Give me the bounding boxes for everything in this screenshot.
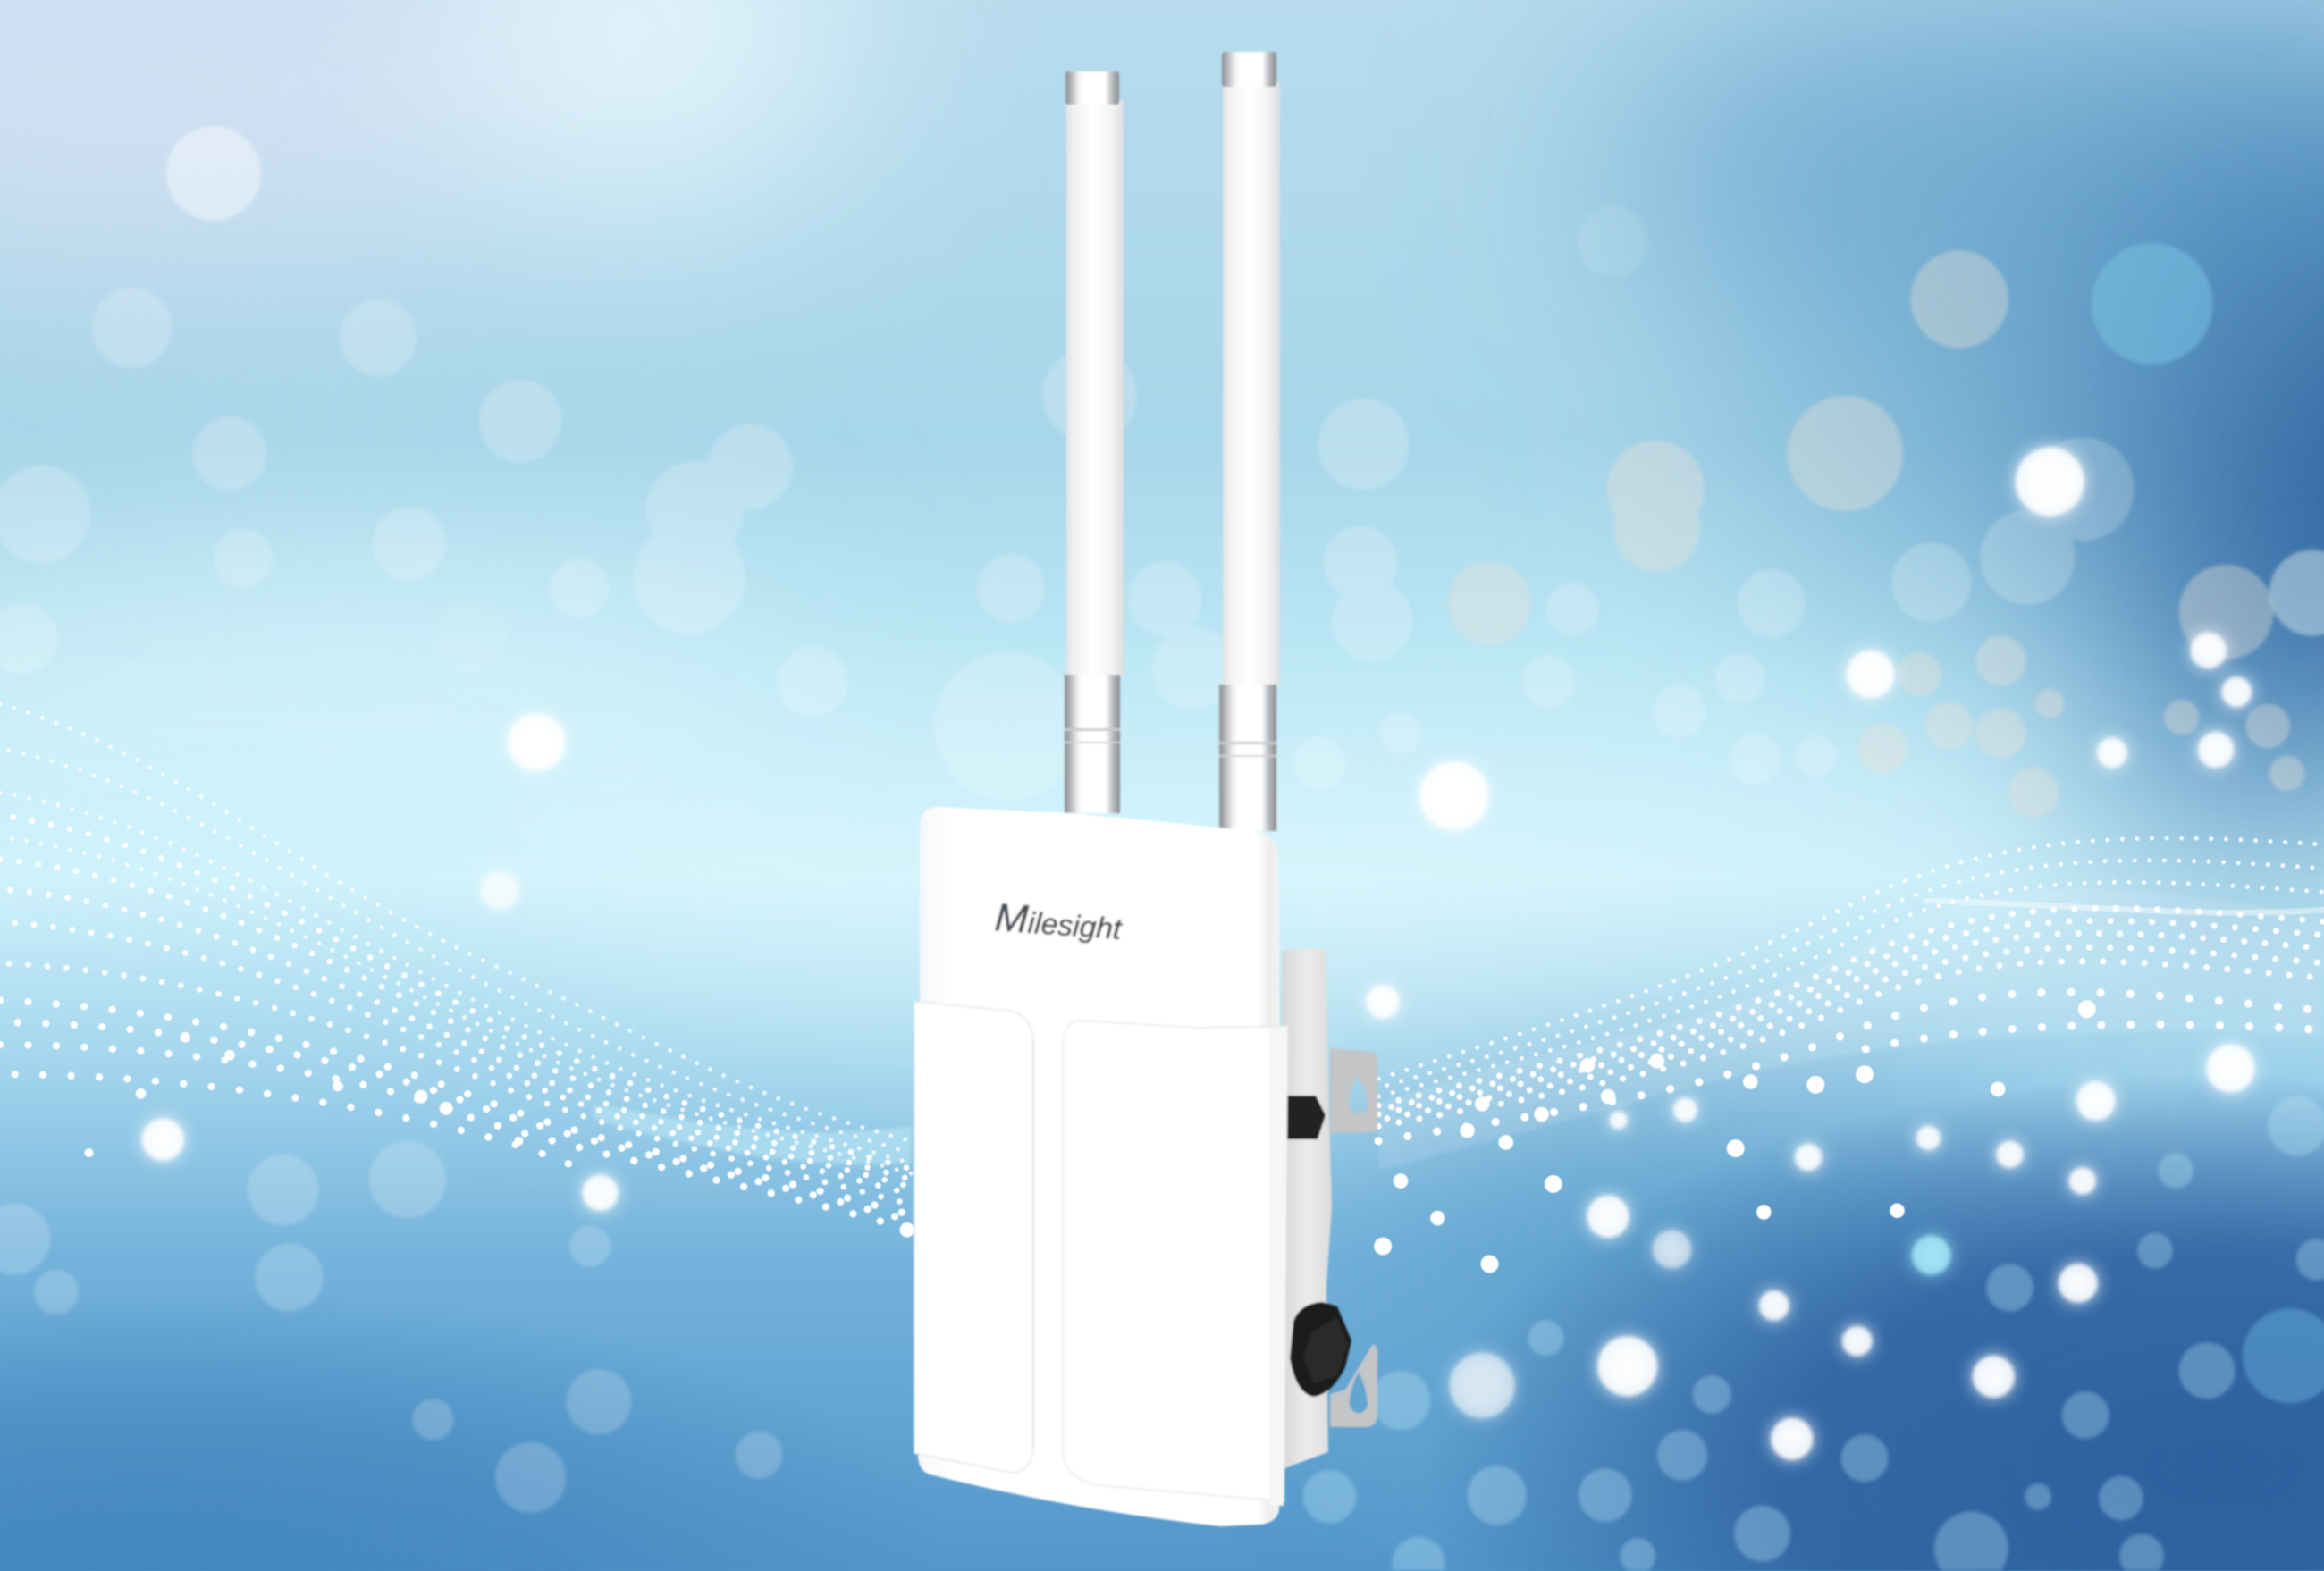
wave light bands <box>593 888 2324 1171</box>
mounting bracket <box>1282 948 1377 1470</box>
gateway device <box>914 52 1377 1526</box>
bolt upper <box>1287 1096 1326 1139</box>
housing <box>914 807 1287 1526</box>
dotted wave right <box>1374 838 2324 1273</box>
antenna left <box>1065 71 1124 813</box>
dotted wave left <box>0 704 914 1238</box>
sleeve panels <box>914 1002 1033 1473</box>
logo: Milesight <box>993 895 1124 948</box>
antenna right <box>1219 52 1280 831</box>
bolt lower <box>1290 1302 1351 1397</box>
bright lights <box>142 448 2254 1459</box>
edge shadows <box>1032 1041 1034 1448</box>
